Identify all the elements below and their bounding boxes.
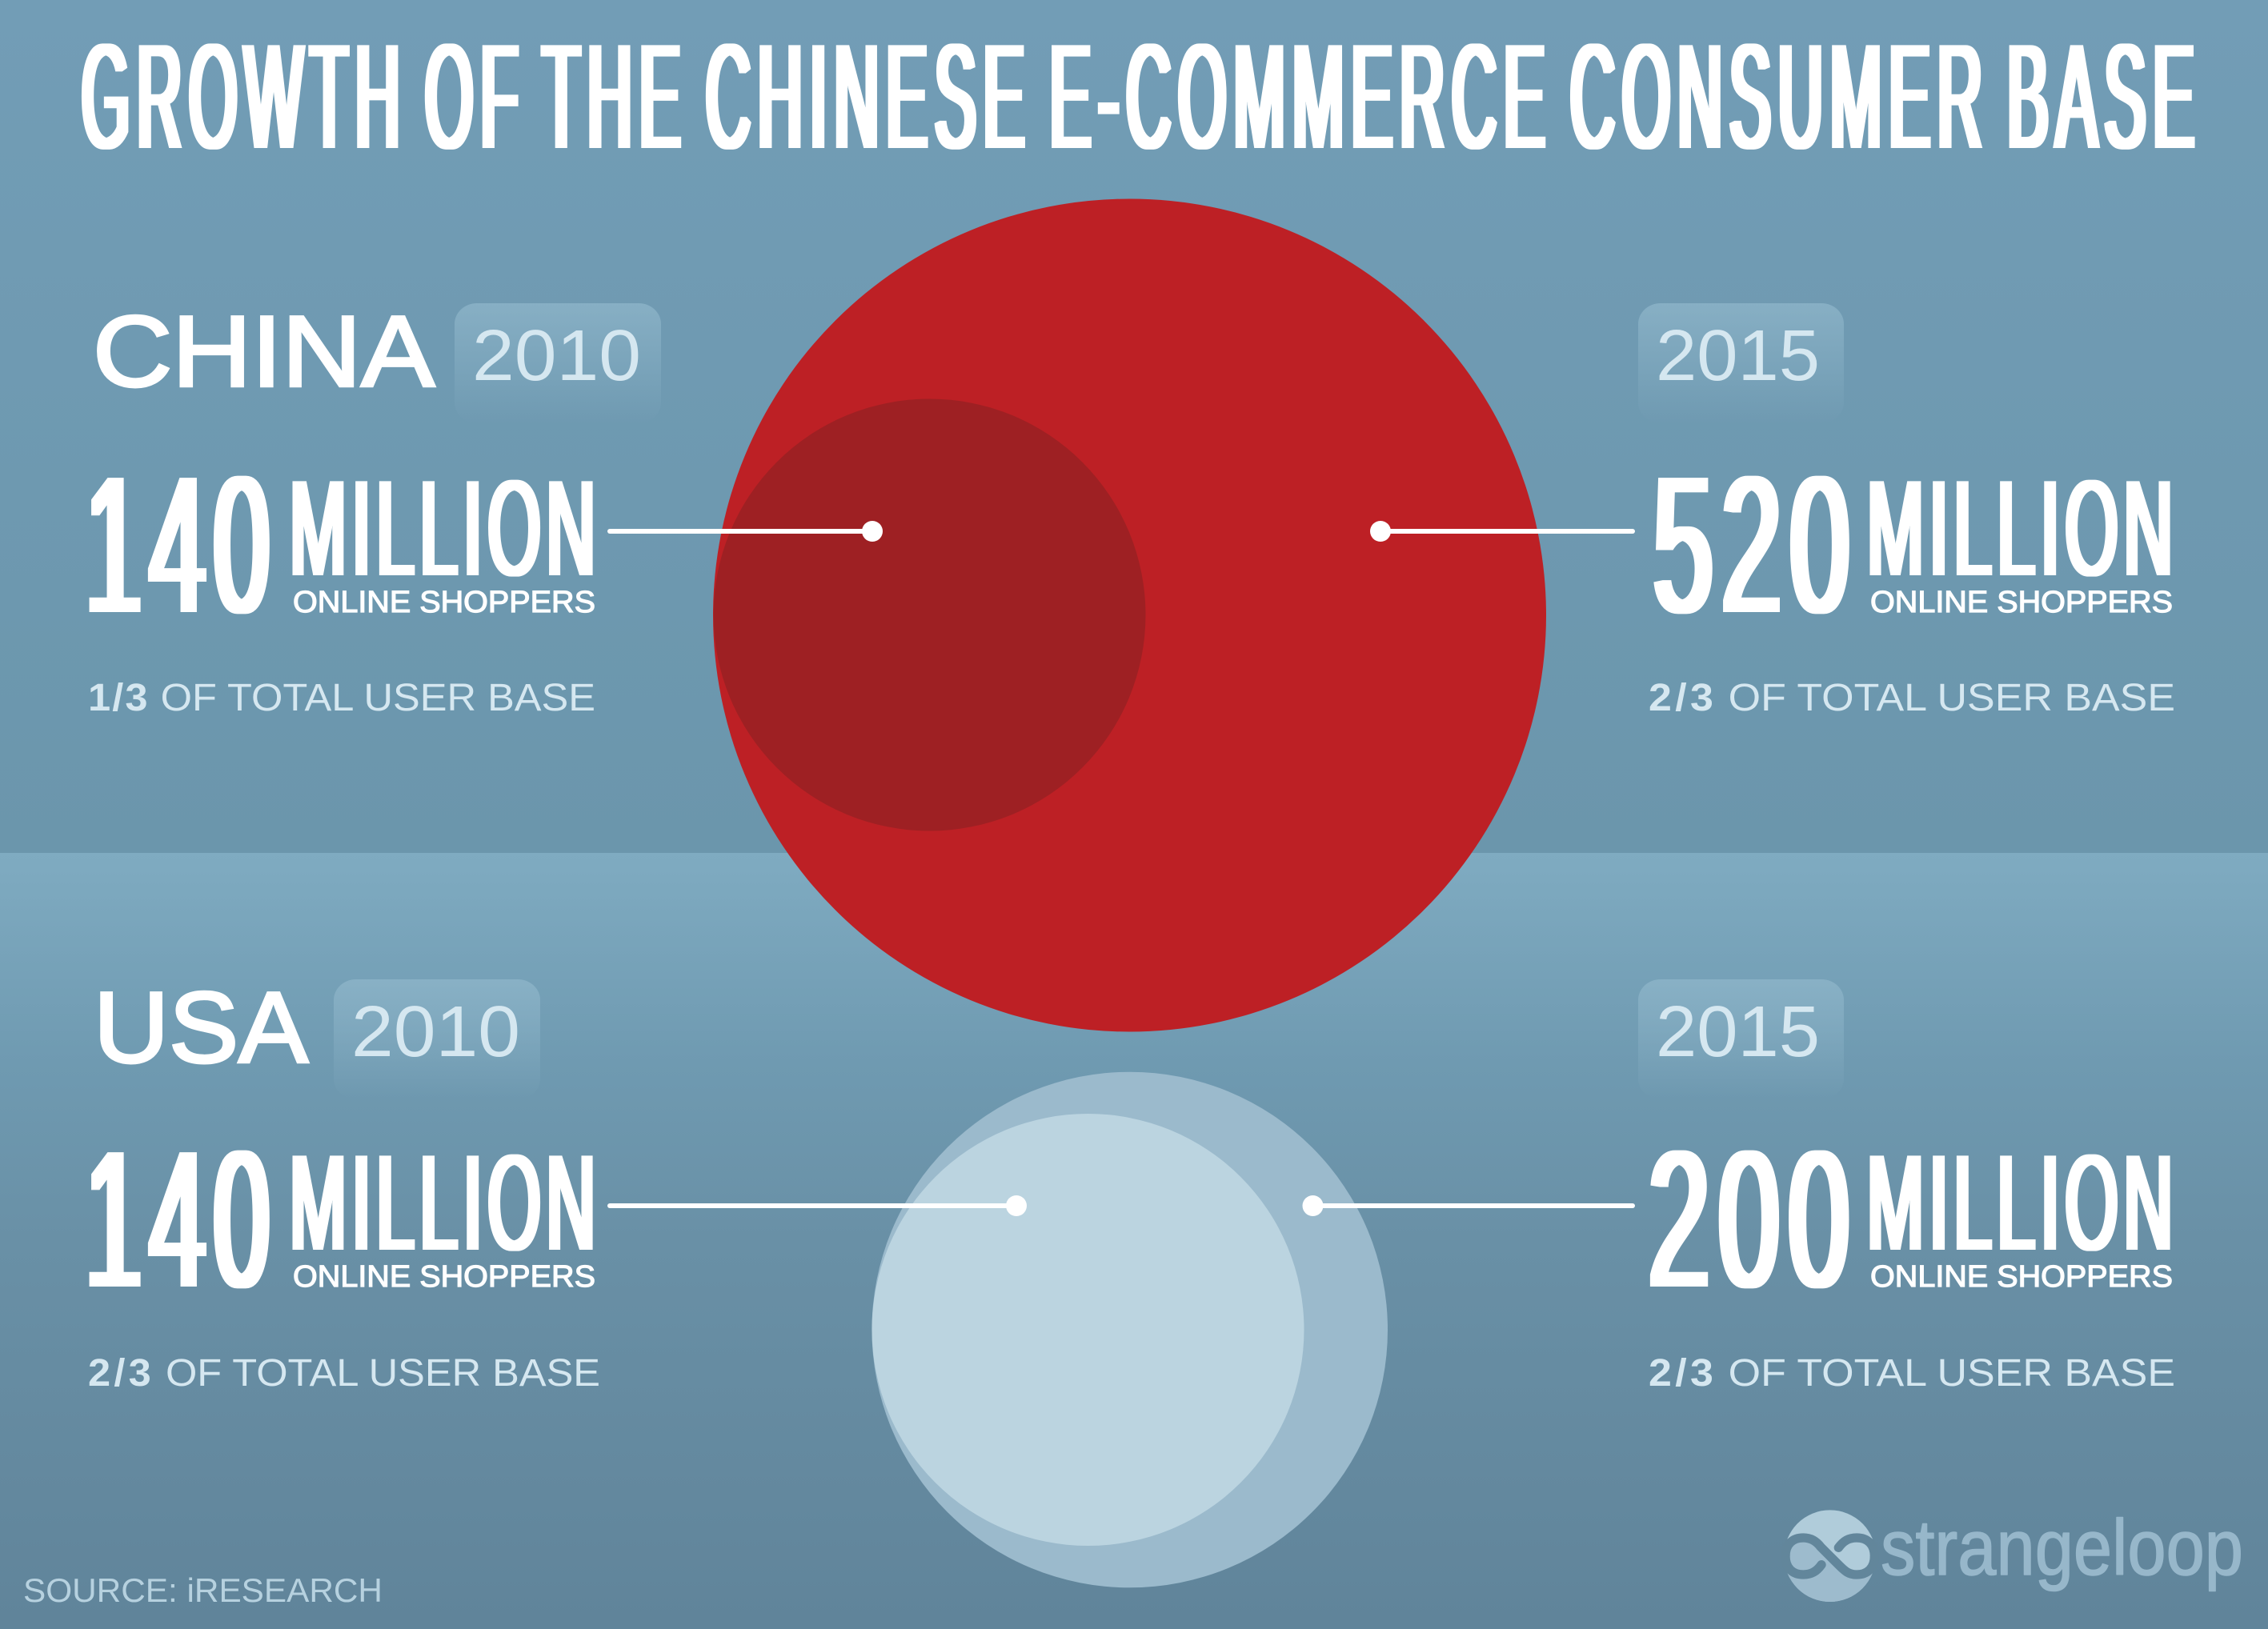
background: lower section — [0, 853, 2268, 1629]
panel: China 2010 — [86, 294, 883, 719]
share: 2/3 of total user base: 2/3 OF TOTAL USER BASE — [1649, 1352, 2175, 1395]
panel: USA 2015 — [1303, 979, 2178, 1395]
circle: USA 2015 — [872, 1072, 1388, 1587]
stat: 140 million: 140 — [86, 1110, 278, 1328]
stat: 520 million: 520 — [1653, 435, 1858, 654]
panel: USA 2010 — [86, 971, 1027, 1395]
circle: China 2010 — [714, 398, 1146, 831]
share: 1/3 of total user base: 1/3 OF TOTAL USER BASE — [88, 677, 595, 719]
year badge: 2010: 2010 — [351, 992, 520, 1072]
stat: 140 million: 140 — [86, 435, 278, 654]
stat: 140 million: ONLINE SHOPPERS — [293, 586, 595, 619]
chart: USA circles — [872, 1072, 1388, 1587]
logo: strangeloop — [1787, 1510, 2241, 1602]
year badge: 2010: 2010 — [472, 316, 641, 396]
stat: 200 million: ONLINE SHOPPERS — [1870, 1260, 2173, 1294]
panel: USA 2010: MILLION — [290, 1127, 601, 1279]
background: upper section — [0, 0, 2268, 853]
year badge: 2010 — [455, 303, 661, 423]
stat: 200 million: 200 — [1649, 1110, 1858, 1328]
stat: 520 million: ONLINE SHOPPERS — [1870, 586, 2173, 619]
source note: SOURCE: iRESEARCH — [23, 1571, 383, 1609]
connector: China 2015 — [1370, 521, 1633, 542]
share: 2/3 of total user base: 2/3 OF TOTAL USER BASE — [88, 1352, 600, 1395]
connector: China 2010 — [610, 521, 883, 542]
heading: USA: USA — [94, 971, 308, 1083]
connector: USA 2015 — [1303, 1195, 1633, 1216]
icon: infinity loop — [1787, 1510, 1873, 1602]
stat: 140 million: ONLINE SHOPPERS — [293, 1260, 595, 1294]
year badge: 2010 — [334, 979, 540, 1099]
year badge: 2015 — [1638, 303, 1844, 423]
circle: USA 2010 — [872, 1114, 1304, 1546]
year badge: 2015 — [1638, 979, 1844, 1099]
panel: China 2010: MILLION — [290, 452, 601, 605]
share: 2/3 of total user base: 2/3 OF TOTAL USER BASE — [1649, 677, 2175, 719]
chart: China circles — [713, 198, 1546, 1032]
circle: China 2015 — [713, 198, 1546, 1032]
panel: China 2015 — [1370, 303, 2178, 719]
year badge: 2015: 2015 — [1656, 316, 1820, 396]
heading: China: CHINA — [93, 294, 435, 408]
connector: USA 2010 — [610, 1195, 1027, 1216]
year badge: 2015: 2015 — [1656, 992, 1820, 1072]
